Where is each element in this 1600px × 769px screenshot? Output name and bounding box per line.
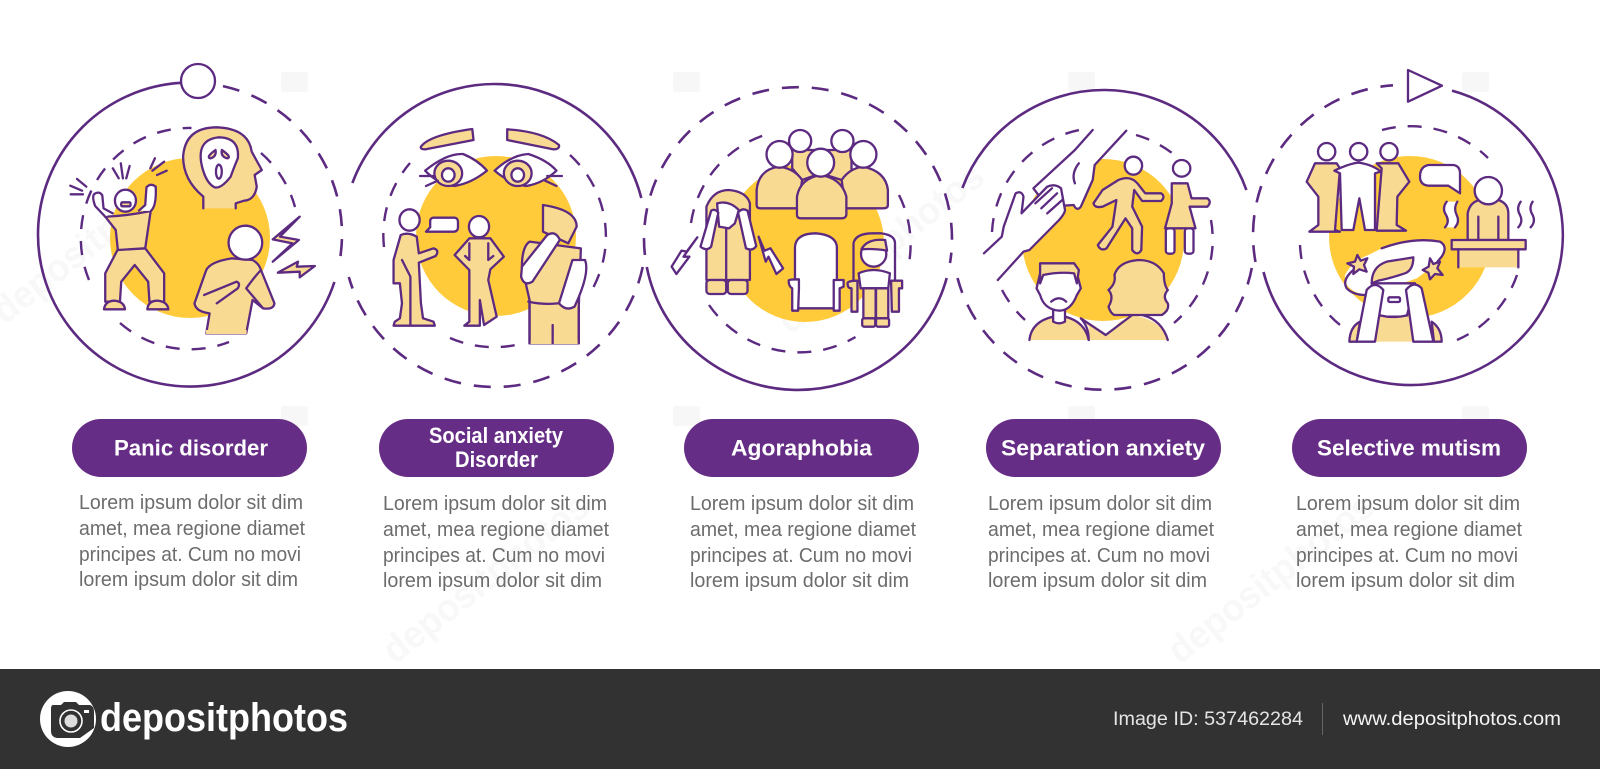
footer bar (0, 669, 1600, 769)
icon: crowd of people (757, 130, 888, 218)
icon: person with head in hands (1345, 240, 1445, 342)
text block: separation anxiety description (988, 492, 1214, 592)
text: depositphotos (1160, 485, 1383, 672)
logo wordmark: depositphotos (100, 696, 348, 740)
icon: person clutching chest (194, 226, 274, 334)
ring: solid arc (962, 90, 1246, 190)
panel: selective mutism (1253, 70, 1563, 592)
image id: Image ID: 537462284 (1113, 709, 1303, 730)
ring: solid arc (352, 84, 641, 198)
ring: dashed arc (1253, 85, 1393, 262)
icons: selective mutism (1307, 143, 1534, 342)
icon: walking woman (1165, 160, 1210, 254)
panel: social anxiety disorder (349, 84, 643, 592)
text block: separation anxiety description: Lorem ipsum dolor sit dim (988, 492, 1212, 515)
icons: agoraphobia (672, 130, 902, 327)
pill heading: Social anxiety Disorder (379, 419, 614, 477)
text block: selective mutism description: amet, mea regione diamet (1296, 518, 1522, 541)
panel: panic disorder (38, 64, 342, 591)
panel: agoraphobia (644, 87, 952, 592)
text block: selective mutism description (1296, 492, 1522, 592)
text block: selective mutism description: principes at. Cum no movi (1296, 544, 1518, 567)
icon: person at podium (1444, 177, 1534, 267)
text block: agoraphobia description (690, 492, 916, 592)
pill heading: Selective mutism: Selective mutism (1317, 436, 1501, 460)
icon: nervous man hand on face (521, 205, 586, 344)
icon: person standing with hands on hips (455, 216, 504, 326)
text block: panic description: principes at. Cum no movi (79, 543, 301, 566)
icon: bolts (672, 237, 783, 274)
icon: person covering face (700, 190, 756, 294)
start marker circle (181, 64, 215, 98)
text block: separation anxiety description: principes at. Cum no movi (988, 544, 1210, 567)
pill heading: Separation anxiety (986, 419, 1221, 477)
text: depositphotos (375, 485, 598, 672)
text block: separation anxiety description: amet, mea regione diamet (988, 518, 1214, 541)
text block: social anxiety description: Lorem ipsum dolor sit dim (383, 492, 607, 515)
icons: separation anxiety (984, 130, 1210, 340)
inner dashed ring (691, 135, 911, 352)
icon: parting hands (984, 130, 1126, 280)
text block: agoraphobia description: Lorem ipsum dolor sit dim (690, 492, 914, 515)
text block: agoraphobia description: amet, mea regione diamet (690, 518, 916, 541)
text block: social anxiety description: lorem ipsum dolor sit dim (383, 569, 602, 592)
text block: social anxiety description: amet, mea regione diamet (383, 518, 609, 541)
text block: selective mutism description: Lorem ipsum dolor sit dim (1296, 492, 1520, 515)
ring: solid arc (647, 267, 947, 390)
blob: yellow circle (110, 158, 270, 318)
blob: yellow circle (1022, 159, 1184, 321)
text block: panic description: lorem ipsum dolor sit dim (79, 568, 298, 591)
panel: separation anxiety (958, 90, 1252, 592)
ring: dashed arc (349, 267, 643, 387)
icon: woman seen from behind (1081, 260, 1168, 340)
inner dashed ring (81, 128, 295, 349)
ring: dashed arc (644, 87, 952, 263)
pill heading: Panic disorder (72, 419, 307, 477)
pill heading: Panic disorder: Panic disorder (114, 436, 268, 460)
icon: head with scream mask (183, 127, 262, 208)
icon: walking person (1093, 157, 1163, 253)
inner dashed ring (1300, 126, 1517, 340)
icon: speech bubble (1420, 165, 1460, 193)
blob: yellow circle (726, 164, 884, 322)
icon: person talking (394, 209, 458, 326)
pill heading: Agoraphobia (684, 419, 919, 477)
text block: agoraphobia description: principes at. Cum no movi (690, 544, 912, 567)
icon: camera logo (40, 691, 96, 747)
icons: panic (70, 127, 315, 334)
text block: panic description (79, 491, 305, 591)
text block: social anxiety description (383, 492, 609, 592)
ring: solid arc (1264, 91, 1563, 385)
text block: separation anxiety description: lorem ipsum dolor sit dim (988, 569, 1207, 592)
ring: solid arc (38, 83, 334, 387)
text block: agoraphobia description: lorem ipsum dolor sit dim (690, 569, 909, 592)
inner dashed ring (992, 130, 1213, 323)
pill heading: Selective mutism (1292, 419, 1527, 477)
inner dashed ring (383, 155, 606, 347)
icon: screaming person (70, 158, 168, 309)
text: depositphotos (770, 155, 993, 342)
pill heading: Social anxiety Disorder: Disorder (455, 447, 538, 472)
icons: social anxiety (394, 129, 586, 344)
pill heading: Agoraphobia: Agoraphobia (731, 436, 872, 460)
pill heading: Social anxiety Disorder: Social anxiety (429, 423, 563, 448)
icon: staring eyes and brows (420, 129, 562, 186)
text block: selective mutism description: lorem ipsum dolor sit dim (1296, 569, 1515, 592)
blob: yellow circle (1329, 156, 1491, 318)
text block: panic description: Lorem ipsum dolor sit dim (79, 491, 303, 514)
icon: empty seat (789, 233, 844, 311)
pill heading: Separation anxiety: Separation anxiety (1001, 436, 1205, 460)
ring: dashed arc (223, 86, 342, 263)
icon: group of three people (1307, 143, 1409, 232)
website url: www.depositphotos.com (1342, 709, 1561, 730)
text block: social anxiety description: principes at. Cum no movi (383, 544, 605, 567)
ring: dashed arc (958, 268, 1252, 390)
icon: child in seat (848, 233, 902, 327)
icon: lightning bolts (273, 217, 315, 277)
end marker triangle (1408, 70, 1442, 102)
blob: yellow circle (416, 156, 576, 316)
text block: panic description: amet, mea regione diamet (79, 517, 305, 540)
icon: sad boy (1029, 263, 1089, 340)
